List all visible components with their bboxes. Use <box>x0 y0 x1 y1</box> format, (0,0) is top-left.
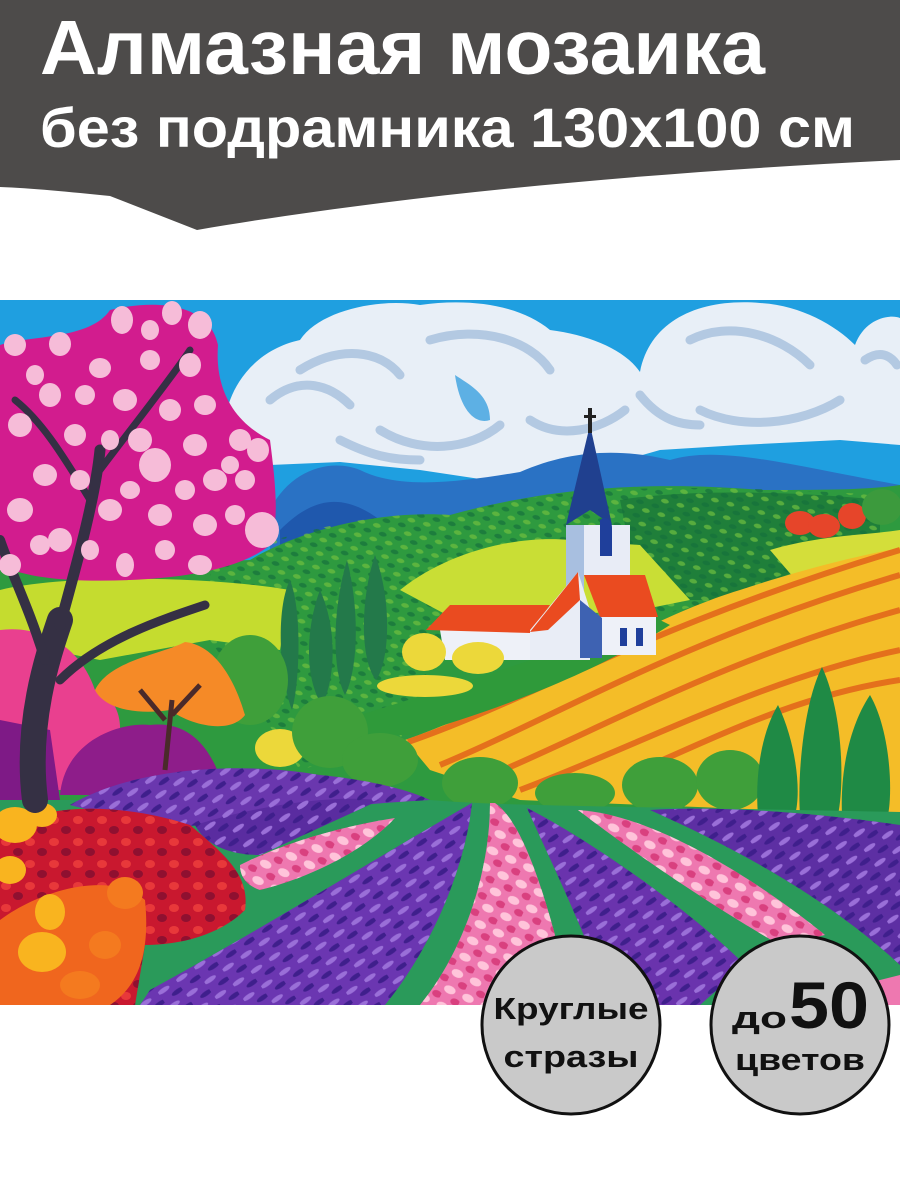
mid green slope <box>360 615 670 735</box>
badge: round rhinestones: стразы <box>504 1039 638 1074</box>
pink flower rows <box>240 803 900 1005</box>
lavender rows <box>70 768 900 1005</box>
green bushes <box>212 635 764 813</box>
badge: up to 50 colours: цветов <box>735 1042 865 1077</box>
badge: up to 50 colours: 50 <box>789 968 869 1042</box>
far right light hill <box>770 530 900 585</box>
clouds <box>225 302 900 482</box>
panel: painting of a church in lavender fields <box>0 300 900 1005</box>
purple bush left <box>0 720 60 800</box>
pink flower texture <box>240 803 825 1005</box>
field furrows <box>408 550 900 790</box>
red flowers <box>0 809 246 1005</box>
lavender field ground <box>0 800 900 1005</box>
badge: up to 50 colours <box>711 936 889 1114</box>
lavender texture <box>70 768 900 1005</box>
sky <box>0 300 900 600</box>
yellow blooms <box>0 803 66 972</box>
orange tree <box>95 642 245 770</box>
light hill behind church <box>400 539 690 622</box>
red flower texture <box>0 809 246 1005</box>
cloud shading <box>270 331 897 460</box>
subtitle: без подрамника 130х100 см <box>40 96 855 159</box>
pink blossom tree <box>0 301 279 800</box>
far bush <box>862 489 900 525</box>
cloud sky gap <box>455 375 490 421</box>
purple bush <box>60 724 225 795</box>
near mountain <box>280 502 440 560</box>
green hills <box>0 485 900 810</box>
left light field <box>0 579 290 660</box>
orange flowers <box>0 885 146 1005</box>
church <box>426 408 658 660</box>
yellow field <box>405 548 900 815</box>
dark hill <box>620 492 880 600</box>
title: Алмазная мозаика <box>40 5 766 91</box>
orange blooms <box>60 877 143 999</box>
badge: round rhinestones <box>482 936 660 1114</box>
header banner <box>0 0 900 230</box>
mountains <box>270 453 900 560</box>
pink bushes left <box>0 629 120 790</box>
yellow bushes <box>255 633 504 767</box>
hill texture <box>210 488 880 770</box>
right cypresses <box>757 667 890 815</box>
badge: round rhinestones: Круглые <box>494 991 648 1026</box>
red bushes <box>785 503 866 538</box>
badge: up to 50 colours: до <box>732 1000 787 1035</box>
cypress group <box>281 555 387 710</box>
